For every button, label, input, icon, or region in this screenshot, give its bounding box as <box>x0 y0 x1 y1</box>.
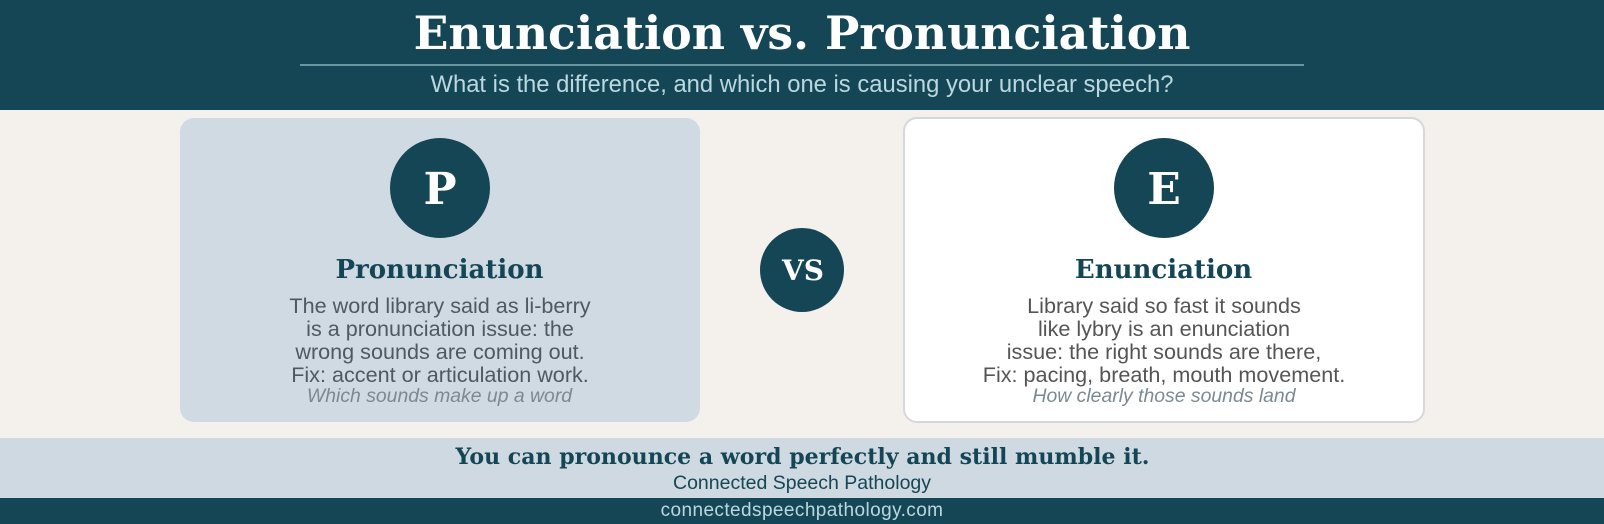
badge: VS <box>760 228 844 312</box>
header band <box>0 0 1604 110</box>
description: pronunciation <box>289 293 591 387</box>
description: pronunciation: Fix: accent or articulation work. <box>291 362 589 387</box>
description: pronunciation: is a pronunciation issue: the <box>306 316 574 341</box>
tagline: enunciation: How clearly those sounds land <box>1032 385 1296 407</box>
icon: E circle: E <box>1147 164 1181 214</box>
badge: VS: VS <box>782 254 824 286</box>
takeaway strip <box>0 438 1604 498</box>
panel: enunciation <box>903 117 1425 423</box>
website: connectedspeechpathology.com <box>661 500 943 521</box>
brand name: Connected Speech Pathology <box>673 472 931 494</box>
panel: pronunciation <box>180 118 700 422</box>
description: enunciation: issue: the right sounds are there, <box>1007 339 1321 364</box>
description: enunciation <box>983 293 1345 387</box>
icon: P circle <box>390 138 490 238</box>
title: Enunciation vs. Pronunciation <box>414 6 1190 60</box>
heading: pronunciation: Pronunciation <box>336 255 544 285</box>
subtitle: What is the difference, and which one is causing your unclear speech? <box>430 70 1174 98</box>
tagline: pronunciation: Which sounds make up a word <box>307 385 572 407</box>
description: enunciation: Fix: pacing, breath, mouth movement. <box>983 362 1345 387</box>
icon: P circle: P <box>423 164 457 214</box>
description: pronunciation: wrong sounds are coming out. <box>295 339 585 364</box>
footer band <box>0 498 1604 524</box>
description: enunciation: like lybry is an enunciation <box>1038 316 1290 341</box>
heading: enunciation: Enunciation <box>1075 255 1252 285</box>
description: enunciation: Library said so fast it sounds <box>1027 293 1301 318</box>
icon: E circle <box>1114 138 1214 238</box>
takeaway statement: You can pronounce a word perfectly and still mumble it. <box>456 444 1149 470</box>
header rule <box>300 64 1304 66</box>
description: pronunciation: The word library said as li-berry <box>289 293 591 318</box>
